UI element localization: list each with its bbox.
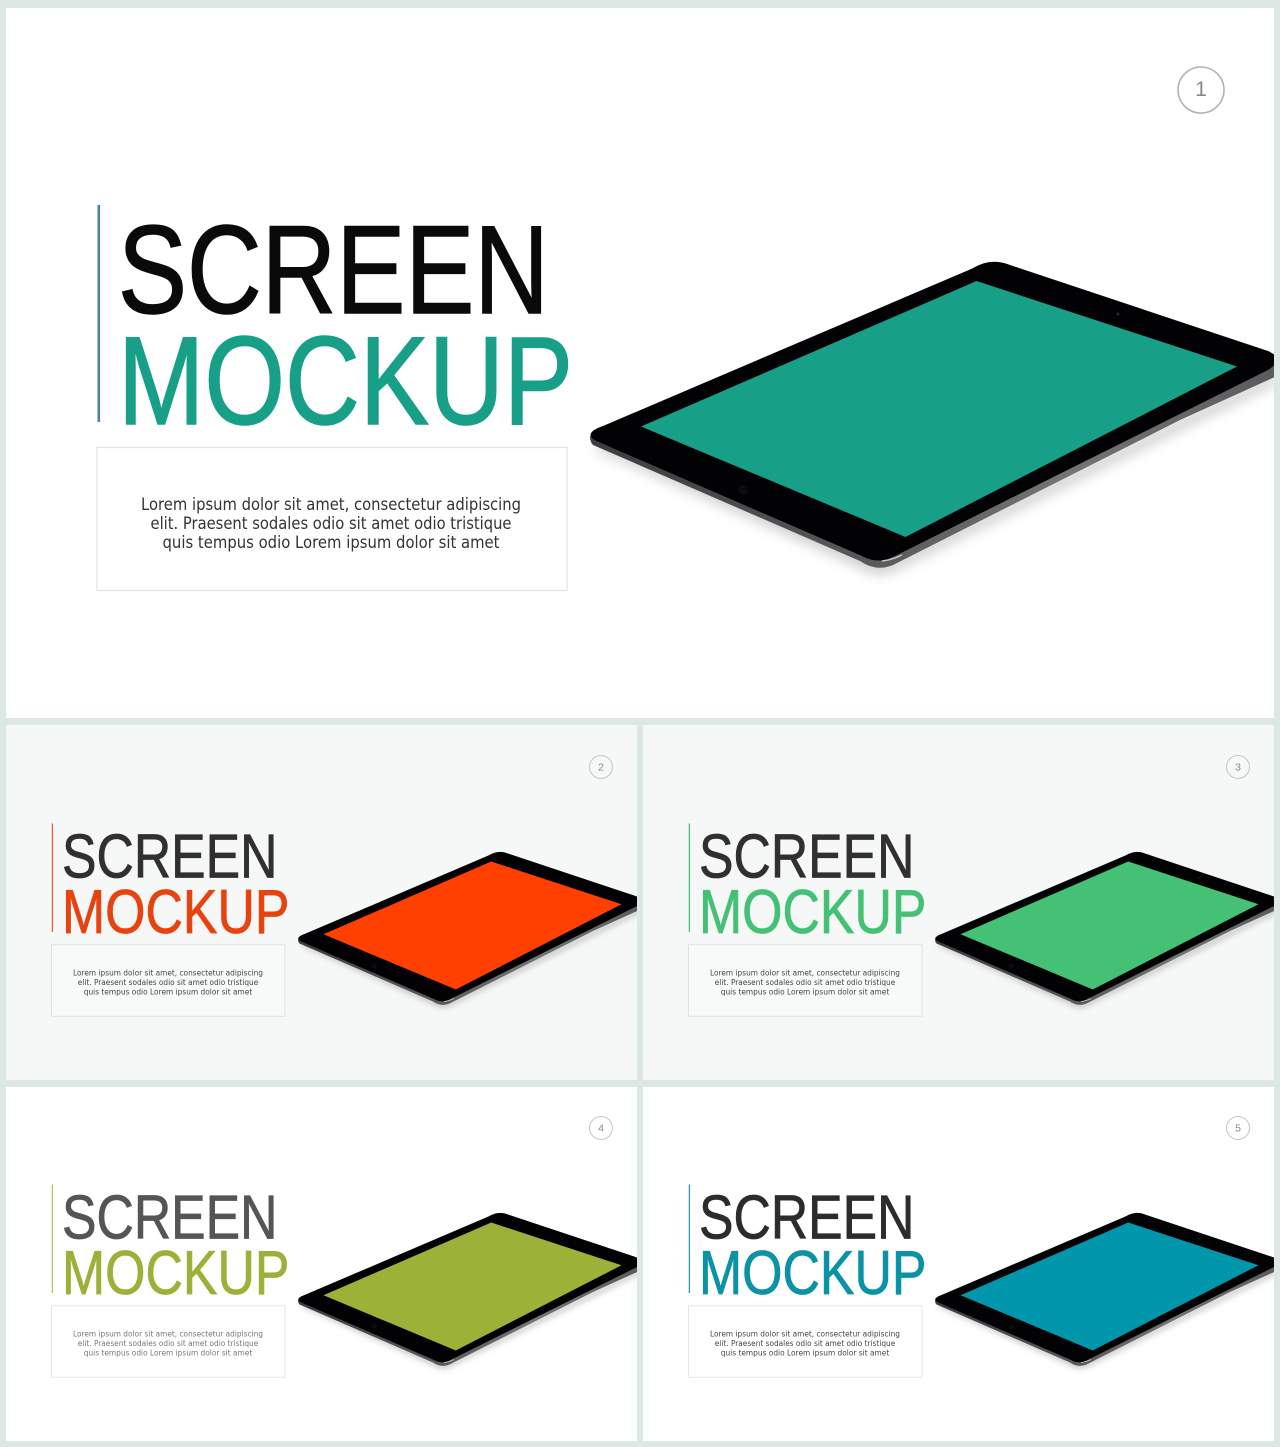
title: SCREEN	[118, 201, 549, 340]
text box: elit. Praesent sodales odio sit amet odio tristique	[715, 1338, 895, 1348]
text box: quis tempus odio Lorem ipsum dolor sit amet	[162, 533, 500, 552]
slide number 2	[590, 756, 612, 778]
slide number 3: 3	[1235, 762, 1241, 774]
title: MOCKUP	[118, 312, 573, 451]
text box	[688, 1306, 922, 1377]
text box	[688, 945, 922, 1016]
panel 1: main slide, teal	[6, 8, 1277, 718]
text box: Lorem ipsum dolor sit amet, consectetur adipiscing	[710, 968, 900, 978]
text box: elit. Praesent sodales odio sit amet odio tristique	[78, 1338, 258, 1348]
panel 5: teal blue	[643, 1087, 1278, 1441]
tablet mockup	[298, 1213, 642, 1369]
title: MOCKUP	[62, 877, 290, 947]
title: MOCKUP	[62, 1238, 290, 1308]
panel 4: olive	[6, 1087, 642, 1441]
text box	[97, 448, 567, 590]
slide number 4: 4	[598, 1122, 604, 1134]
text box: Lorem ipsum dolor sit amet, consectetur adipiscing	[73, 968, 263, 978]
slide number 2: 2	[598, 762, 604, 774]
slide number 5: 5	[1235, 1122, 1241, 1134]
tablet mockup	[298, 852, 642, 1008]
slide number 1	[1178, 67, 1224, 113]
title: SCREEN	[699, 822, 914, 892]
slide number 3	[1226, 756, 1250, 778]
title: SCREEN	[62, 822, 278, 892]
title	[64, 834, 287, 934]
title	[64, 1194, 287, 1295]
title	[701, 1194, 924, 1295]
slide number 1: 1	[1195, 78, 1207, 101]
slide number 4	[590, 1116, 612, 1140]
text box	[52, 945, 285, 1016]
title: MOCKUP	[699, 1238, 926, 1308]
text box: Lorem ipsum dolor sit amet, consectetur adipiscing	[710, 1328, 900, 1338]
text box: quis tempus odio Lorem ipsum dolor sit amet	[721, 986, 890, 996]
text box: Lorem ipsum dolor sit amet, consectetur adipiscing	[141, 495, 521, 514]
tablet mockup	[590, 262, 1277, 574]
panel 2: orange	[6, 725, 642, 1080]
title	[701, 834, 924, 934]
text box: elit. Praesent sodales odio sit amet odio tristique	[715, 977, 895, 987]
text box	[52, 1306, 285, 1377]
accent line	[52, 824, 53, 932]
title	[122, 224, 568, 426]
accent line	[689, 1184, 690, 1293]
slide number 5	[1226, 1116, 1250, 1140]
title: MOCKUP	[699, 877, 926, 947]
title: SCREEN	[699, 1182, 914, 1252]
text box: quis tempus odio Lorem ipsum dolor sit amet	[84, 1348, 253, 1358]
text box: quis tempus odio Lorem ipsum dolor sit amet	[84, 986, 253, 996]
tablet mockup	[935, 1213, 1278, 1369]
text box: elit. Praesent sodales odio sit amet odio tristique	[150, 514, 512, 533]
panel 3: green	[643, 725, 1278, 1080]
text box: quis tempus odio Lorem ipsum dolor sit amet	[721, 1348, 890, 1358]
text box: Lorem ipsum dolor sit amet, consectetur adipiscing	[73, 1328, 263, 1338]
tablet mockup	[935, 852, 1278, 1008]
text box: elit. Praesent sodales odio sit amet odio tristique	[78, 977, 258, 987]
accent line	[52, 1184, 53, 1293]
accent line	[689, 824, 690, 932]
title: SCREEN	[62, 1182, 278, 1252]
accent line	[98, 205, 100, 422]
